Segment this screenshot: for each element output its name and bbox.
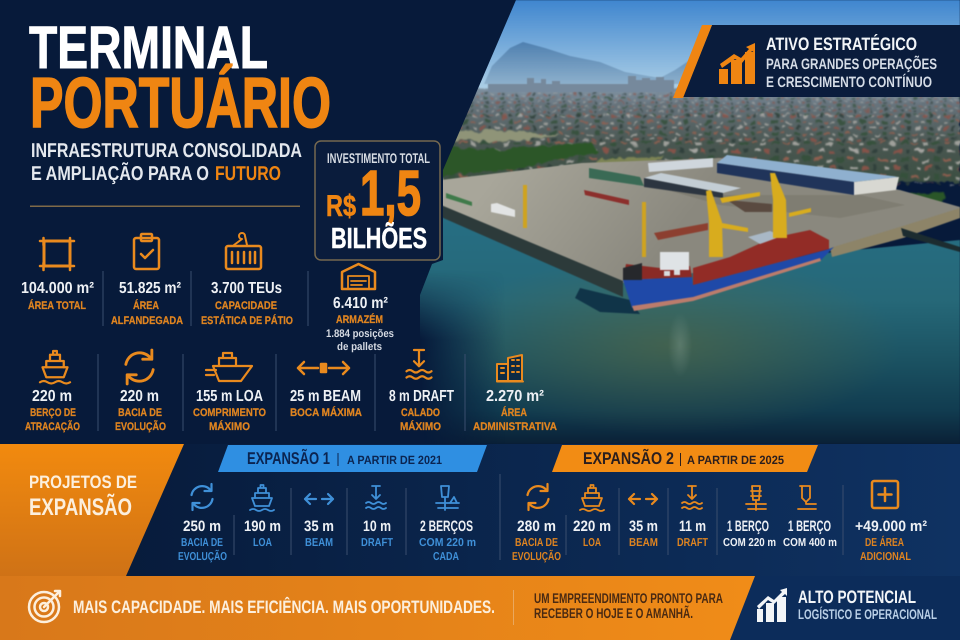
subtitle: FUTURO	[215, 163, 281, 185]
panel fade into water	[420, 278, 495, 442]
water glint	[668, 313, 692, 377]
stat: yard capacity: 3.700 TEUs	[211, 280, 282, 297]
stat: warehouse	[326, 264, 394, 353]
item: draft: DRAFT	[361, 537, 393, 549]
sky	[470, 0, 960, 90]
statement: UM EMPREENDIMENTO PRONTO PARA	[534, 590, 723, 606]
icon: growth chart	[719, 43, 755, 84]
trees left	[440, 142, 600, 176]
stat: administrative area: ADMINISTRATIVA	[473, 421, 557, 433]
icon: draft	[682, 486, 702, 509]
panel: bottom navy strip	[700, 576, 960, 640]
stat: total area	[21, 238, 94, 312]
item: additional area: +49.000 m²	[855, 518, 927, 535]
icon: building	[497, 355, 523, 382]
callout: total investment: BILHÕES	[331, 222, 427, 255]
stat: warehouse: de pallets	[337, 341, 382, 353]
callout: total investment: R$	[326, 190, 356, 223]
subtitle: INFRAESTRUTURA CONSOLIDADA	[31, 140, 302, 162]
icon: turning arrows	[126, 350, 153, 384]
icon: arrows	[629, 494, 657, 504]
item: berth 220: COM 220 m	[723, 537, 776, 549]
stat: customs area: ÁREA	[133, 299, 159, 312]
item: basin: 250 m	[183, 518, 221, 535]
subtitle	[31, 140, 302, 185]
item: additional area	[855, 481, 927, 563]
field	[590, 156, 665, 168]
icon: clipboard	[134, 234, 159, 269]
mountains	[484, 42, 700, 84]
icon: ship	[580, 485, 604, 511]
stat: yard capacity	[201, 233, 293, 327]
icon: container	[226, 233, 261, 269]
item: berths: COM 220 m	[419, 537, 476, 549]
stat: administrative area: ÁREA	[501, 406, 527, 419]
icon: turning arrows	[528, 484, 548, 510]
apron shade	[650, 185, 905, 218]
ship shadow	[575, 288, 640, 314]
quay rocks right	[830, 208, 960, 257]
slogan: MAIS CAPACIDADE. MAIS EFICIÊNCIA. MAIS OPORTUNIDADES.	[73, 596, 495, 617]
item: basin	[512, 484, 561, 563]
item: basin	[178, 484, 227, 563]
panel: orange expansion heading: PROJETOS DE	[29, 472, 137, 492]
stat: length overall: MÁXIMO	[209, 420, 250, 433]
item: LOA	[244, 485, 281, 549]
red containers	[584, 190, 629, 205]
panel: left dark background	[0, 0, 516, 444]
stat: length overall	[193, 353, 266, 433]
item: LOA: 220 m	[573, 518, 611, 535]
stat: total area: 104.000 m²	[21, 280, 94, 297]
icon: draft	[406, 350, 432, 379]
item: berths: 2 BERÇOS	[420, 518, 473, 535]
item: draft: DRAFT	[677, 537, 708, 549]
callout: total investment: INVESTIMENTO TOTAL	[327, 150, 430, 166]
callout: high potential: ALTO POTENCIAL	[798, 587, 916, 607]
panel: expansion 2	[512, 445, 927, 563]
title line 2: PORTUÁRIO	[30, 64, 331, 143]
item: additional area: DE ÁREA	[865, 535, 904, 549]
water reflection	[440, 255, 900, 435]
trees right	[882, 193, 945, 214]
yellow posts	[523, 185, 646, 257]
item: basin: EVOLUÇÃO	[178, 549, 227, 563]
main warehouse	[717, 155, 899, 195]
panel: bottom orange strip	[0, 576, 755, 640]
orange accent	[673, 25, 712, 98]
item: berths	[419, 486, 476, 563]
stat: warehouse: 6.410 m²	[333, 295, 388, 312]
item: berth 400: 1 BERÇO	[788, 518, 831, 535]
item: draft	[361, 486, 393, 549]
stat: yard capacity: ESTÁTICA DE PÁTIO	[201, 314, 293, 327]
icon: width arrows	[298, 362, 349, 374]
item: berth 400	[783, 486, 837, 549]
stat: customs area: ALFANDEGADA	[111, 315, 183, 327]
panel: expansion band	[0, 444, 960, 576]
stat: berth	[25, 351, 80, 433]
stat: berth: BERÇO DE	[30, 407, 76, 419]
statement: RECEBER O HOJE E O AMANHÃ.	[534, 605, 693, 621]
stat: beam: BOCA MÁXIMA	[290, 406, 362, 419]
stat: yard capacity: CAPACIDADE	[215, 300, 277, 312]
mid warehouse	[644, 173, 741, 198]
clearing	[440, 130, 560, 142]
item: beam: BEAM	[305, 537, 333, 549]
item: LOA: LOA	[253, 537, 272, 549]
item: basin: BACIA DE	[515, 537, 558, 549]
item: LOA	[573, 485, 611, 549]
item: basin: EVOLUÇÃO	[512, 549, 561, 563]
stat: warehouse: 1.884 posições	[326, 328, 394, 340]
item: berth 220	[723, 486, 776, 549]
item: berths: CADA	[433, 551, 459, 563]
water	[410, 200, 960, 444]
item: additional area: ADICIONAL	[860, 551, 911, 563]
small warehouse	[648, 158, 713, 172]
callout: strategic asset: ATIVO ESTRATÉGICO	[766, 34, 917, 54]
ribbon: expansion 1: EXPANSÃO 1	[247, 448, 330, 468]
icon: cargo ship	[206, 353, 252, 381]
stat: length overall: COMPRIMENTO	[193, 407, 266, 419]
title line 1: TERMINAL	[29, 14, 268, 81]
item: LOA: LOA	[583, 537, 601, 549]
stat: customs area: 51.825 m²	[119, 280, 181, 297]
ribbon: expansion 1	[218, 445, 487, 472]
white box	[491, 203, 515, 217]
item: draft	[677, 486, 708, 549]
icon: area frame	[40, 238, 74, 270]
stat: administrative area	[473, 355, 557, 433]
ribbon: expansion 2	[552, 445, 818, 472]
callout: total investment: 1,5	[360, 157, 421, 229]
item: basin: BACIA DE	[181, 537, 223, 549]
yard	[441, 158, 960, 283]
callout: high potential	[757, 587, 937, 622]
containers near cranes	[654, 223, 708, 240]
pier	[901, 228, 960, 252]
stat: turning basin: 220 m	[120, 388, 159, 405]
icon: warehouse	[342, 264, 375, 289]
stat: total area: ÁREA TOTAL	[28, 299, 86, 312]
item: beam	[304, 494, 334, 549]
stat: turning basin: BACIA DE	[118, 407, 162, 419]
stat: turning basin	[115, 350, 166, 433]
photo: aerial view of the port	[410, 0, 960, 444]
stat: warehouse: ARMAZÉM	[336, 313, 383, 326]
icon: ship	[40, 351, 70, 384]
stat: draft: CALADO	[401, 407, 440, 419]
ribbon: expansion 2: EXPANSÃO 2	[583, 448, 674, 468]
stat: berth: 220 m	[32, 388, 72, 405]
stat: beam: 25 m BEAM	[290, 388, 361, 405]
icon: berth	[798, 486, 816, 509]
item: beam: 35 m	[629, 518, 658, 535]
green box	[446, 193, 472, 206]
quay wall	[441, 205, 623, 297]
stat: berth: ATRACAÇÃO	[25, 420, 80, 433]
stat: administrative area: 2.270 m²	[486, 388, 544, 405]
icon: turning arrows	[192, 484, 212, 510]
green containers	[589, 168, 644, 186]
crane one	[706, 190, 760, 257]
item: berth 400: COM 400 m	[783, 537, 837, 549]
icon: growth chart	[757, 588, 787, 622]
crane two	[770, 173, 811, 238]
stat: length overall: 155 m LOA	[196, 388, 263, 405]
icon: target	[29, 591, 60, 622]
panel: orange expansion heading: EXPANSÃO	[29, 493, 132, 521]
title	[29, 14, 331, 143]
item: draft: 10 m	[363, 518, 391, 535]
icon: ship	[250, 485, 274, 511]
callout: total investment	[315, 141, 440, 260]
icon: plus box	[872, 481, 898, 508]
stat: customs area	[111, 234, 183, 327]
stat: draft: MÁXIMO	[400, 420, 441, 433]
item: beam	[629, 494, 658, 549]
callout: strategic asset	[673, 25, 960, 98]
icon: berth	[746, 486, 766, 510]
stat: beam	[290, 362, 362, 419]
item: LOA: 190 m	[244, 518, 281, 535]
stat: turning basin: EVOLUÇÃO	[115, 420, 166, 433]
item: draft: 11 m	[679, 518, 706, 535]
panel: orange expansion heading	[0, 444, 184, 576]
item: beam: 35 m	[304, 518, 334, 535]
panel: expansion 1	[178, 445, 487, 563]
city	[430, 88, 960, 214]
subtitle: E AMPLIAÇÃO PARA O	[31, 162, 209, 185]
icon: draft	[366, 486, 386, 509]
stat: draft	[389, 350, 454, 433]
item: berth 220: 1 BERÇO	[727, 518, 769, 535]
icon: berth	[436, 486, 459, 510]
ribbon: expansion 2: A PARTIR DE 2025	[687, 453, 784, 467]
icon: arrows	[305, 494, 333, 504]
containers near warehouse	[727, 200, 772, 212]
ribbon: expansion 1: A PARTIR DE 2021	[347, 453, 442, 467]
item: basin: 280 m	[517, 518, 556, 535]
skyline	[488, 76, 674, 92]
stat: draft: 8 m DRAFT	[389, 388, 454, 405]
ship	[623, 230, 834, 311]
item: beam: BEAM	[629, 537, 658, 549]
statement	[534, 590, 723, 621]
